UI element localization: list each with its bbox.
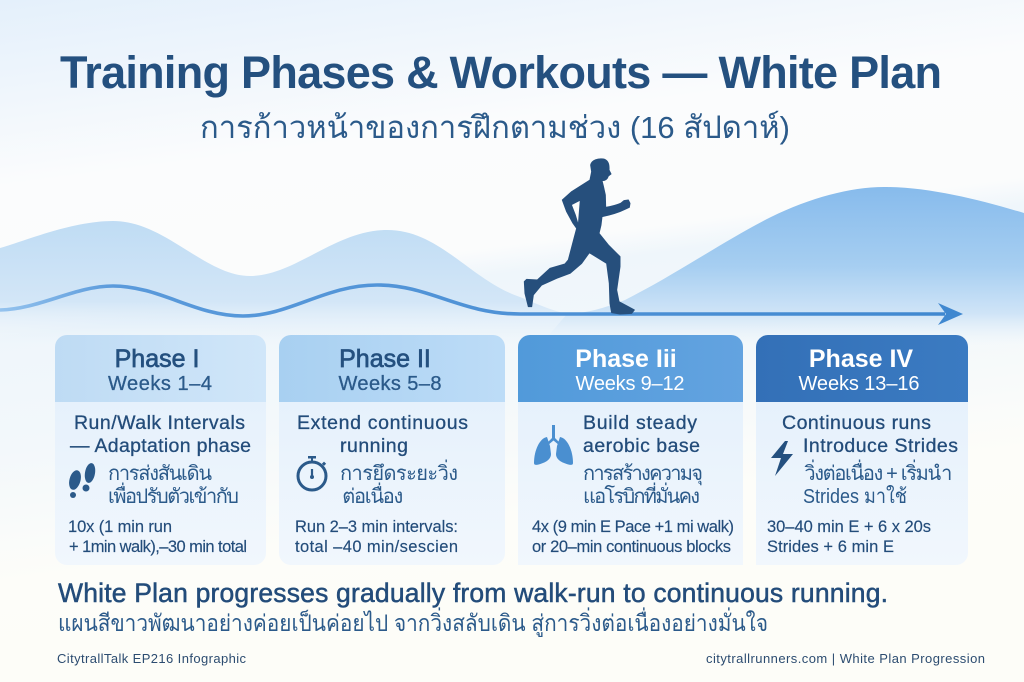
- phase 1 thai text line 2: เพื่อปรับตัวเข้ากับ: [108, 482, 239, 508]
- phase 4 workout line 2: Strides + 6 min E: [767, 538, 894, 556]
- phase 3 workout line 2: or 20–min continuous blocks: [532, 538, 731, 556]
- phase 2 thai text: การยึดระยะวิ่ง: [340, 459, 458, 485]
- phase 1 heading: Phase I: [115, 345, 199, 373]
- panel: phase 1: [55, 335, 266, 565]
- right hill: [540, 187, 1024, 345]
- panel: phase 2: [279, 335, 505, 565]
- subtitle: การก้าวหน้าของการฝึกตามช่วง (16 สัปดาห์): [200, 110, 790, 145]
- phase 1 weeks: Weeks 1–4: [108, 373, 212, 395]
- phase 2 goal: Extend continuous: [297, 412, 468, 434]
- panel: phase 4: [756, 335, 968, 565]
- footer right: citytrallrunners.com | White Plan Progression: [706, 651, 985, 666]
- phase 4 thai text line 2: Strides มาใช้: [803, 485, 907, 508]
- phase 3 weeks: Weeks 9–12: [576, 373, 684, 395]
- phase 2 weeks: Weeks 5–8: [338, 373, 442, 395]
- phase 2 workout line 2: total –40 min/sescien: [295, 538, 458, 556]
- phase 4 workout: 30–40 min E + 6 x 20s: [767, 518, 931, 536]
- runner silhouette: [524, 159, 634, 314]
- phase 3 goal line 2: aerobic base: [583, 435, 700, 457]
- phase 4 goal line 2: Introduce Strides: [803, 435, 958, 457]
- phase 2 goal line 2: running: [340, 435, 408, 457]
- phase 4 weeks: Weeks 13–16: [798, 373, 920, 395]
- phase 1 workout: 10x (1 min run: [68, 518, 172, 536]
- progress wave arrow: [0, 285, 963, 325]
- summary thai: แผนสีขาวพัฒนาอย่างค่อยเป็นค่อยไป จากวิ่งสลับเดิน สู่การวิ่งต่อเนื่องอย่างมั่นใจ: [58, 607, 768, 637]
- title: Training Phases & Workouts — White Plan: [60, 47, 942, 98]
- phase 1 workout line 2: + 1min walk),–30 min total: [69, 538, 247, 556]
- icon: footprints: [67, 462, 97, 498]
- phase 4 thai text: วิ่งต่อเนื่อง + เริ่มนำ: [804, 459, 952, 485]
- phase 4 goal: Continuous runs: [782, 412, 931, 434]
- panel: phase 3: [518, 335, 743, 565]
- phase 2 thai text line 2: ต่อเนื่อง: [342, 482, 403, 508]
- left hills: [0, 221, 567, 345]
- footer left: CitytrallTalk EP216 Infographic: [57, 651, 246, 666]
- phase 3 thai text line 2: แอโรบิกที่มั่นคง: [583, 482, 700, 508]
- phase 2 workout: Run 2–3 min intervals:: [295, 518, 458, 536]
- phase 1 goal line 2: — Adaptation phase: [70, 435, 251, 457]
- summary: White Plan progresses gradually from walk-run to continuous running.: [58, 578, 888, 608]
- phase 3 goal: Build steady: [583, 412, 697, 434]
- phase 3 workout: 4x (9 min E Pace +1 mi walk): [532, 518, 734, 536]
- phase 1 goal: Run/Walk Intervals: [74, 412, 245, 434]
- icon: stopwatch: [298, 456, 326, 490]
- phase 2 heading: Phase II: [339, 345, 431, 373]
- phase 3 thai text: การสร้างความจุ: [583, 463, 703, 486]
- phase 3 heading: Phase Iii: [575, 345, 677, 373]
- phase 4 heading: Phase IV: [809, 345, 913, 373]
- phase 1 thai text: การส่งสันเดิน: [108, 463, 212, 485]
- icon: lightning bolt: [771, 441, 793, 476]
- icon: lungs: [534, 425, 573, 465]
